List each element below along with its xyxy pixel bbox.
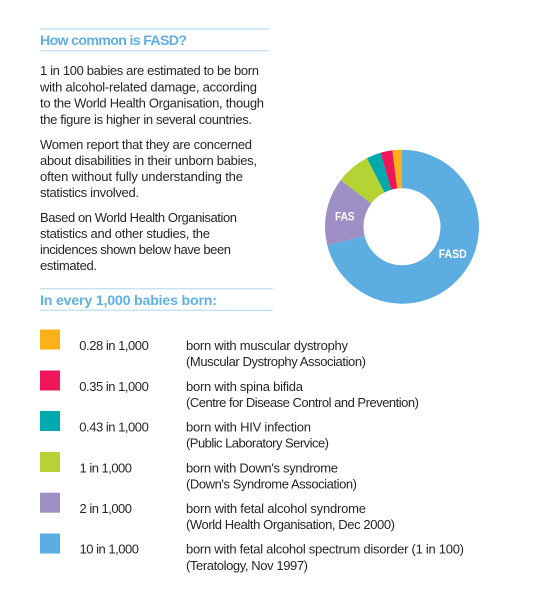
heading: How common is FASD?: How common is FASD? (40, 33, 187, 49)
text block: estimates basis: Based on World Health Organisation (40, 210, 237, 225)
row: Down's syndrome: (Down's Syndrome Association) (186, 476, 357, 492)
segment: FASD (327, 150, 479, 304)
text block: 1 in 100 babies: to the World Health Organisation, though (40, 96, 264, 110)
row: fetal alcohol syndrome: (World Health Organisation, Dec 2000) (186, 517, 395, 532)
text block: 1 in 100 babies: 1 in 100 babies are estimated to be born (40, 63, 259, 78)
text block: women report: about disabilities in their unborn babies, (40, 153, 257, 168)
segment: Down's syndrome (341, 158, 384, 203)
row: muscular dystrophy: 0.28 in 1,000 (79, 338, 149, 353)
row: Down's syndrome (40, 452, 357, 492)
row: fetal alcohol spectrum disorder: (Teratology, Nov 1997) (186, 558, 308, 573)
text block: estimates basis: estimated. (40, 258, 97, 273)
segment: muscular dystrophy (392, 150, 402, 188)
donut chart (325, 150, 479, 304)
row: fetal alcohol syndrome: born with fetal alcohol syndrome (186, 501, 366, 516)
segment: spina bifida (381, 150, 397, 190)
text block: 1 in 100 babies (39, 63, 264, 127)
row: HIV infection (40, 411, 329, 450)
text block: 1 in 100 babies: with alcohol-related damage, according (39, 80, 257, 94)
row: spina bifida: 0.35 in 1,000 (79, 379, 149, 394)
row: muscular dystrophy: born with muscular dystrophy (186, 338, 348, 353)
heading: In every 1,000 babies born: In every 1,000 babies born: (40, 293, 217, 309)
text block: estimates basis: incidences shown below have been (40, 242, 231, 257)
row: muscular dystrophy: (Muscular Dystrophy Association) (186, 354, 366, 369)
text block: women report: often without fully understanding the (40, 169, 243, 184)
row: spina bifida: born with spina bifida (186, 379, 304, 394)
row: HIV infection: (Public Laboratory Service) (186, 436, 329, 450)
label: FAS: FAS (335, 210, 354, 224)
row: fetal alcohol spectrum disorder (40, 534, 464, 573)
segment: FAS (325, 180, 371, 245)
text block: women report: statistics involved. (40, 185, 139, 200)
text block: women report (40, 137, 257, 200)
label: FASD: FASD (439, 247, 467, 261)
row: muscular dystrophy (40, 330, 366, 369)
row: fetal alcohol spectrum disorder: 10 in 1,000 (80, 542, 139, 556)
row: Down's syndrome: born with Down's syndrome (186, 460, 338, 476)
row: HIV infection: 0.43 in 1,000 (79, 420, 149, 434)
row: spina bifida (40, 370, 419, 410)
row: HIV infection: born with HIV infection (186, 420, 311, 434)
segment: HIV infection (367, 153, 391, 192)
row: fetal alcohol syndrome (40, 493, 395, 532)
row: fetal alcohol syndrome: 2 in 1,000 (80, 501, 132, 516)
row: Down's syndrome: 1 in 1,000 (80, 460, 132, 476)
text block: estimates basis: statistics and other studies, the (40, 226, 210, 241)
text block: women report: Women report that they are concerned (40, 137, 252, 152)
text block: 1 in 100 babies: the figure is higher in several countries. (40, 112, 252, 127)
text block: estimates basis (40, 210, 237, 273)
row: spina bifida: (Centre for Disease Control and Prevention) (186, 395, 419, 410)
legend table (40, 330, 464, 573)
row: fetal alcohol spectrum disorder: born with fetal alcohol spectrum disorder (1 in 100) (186, 542, 464, 556)
